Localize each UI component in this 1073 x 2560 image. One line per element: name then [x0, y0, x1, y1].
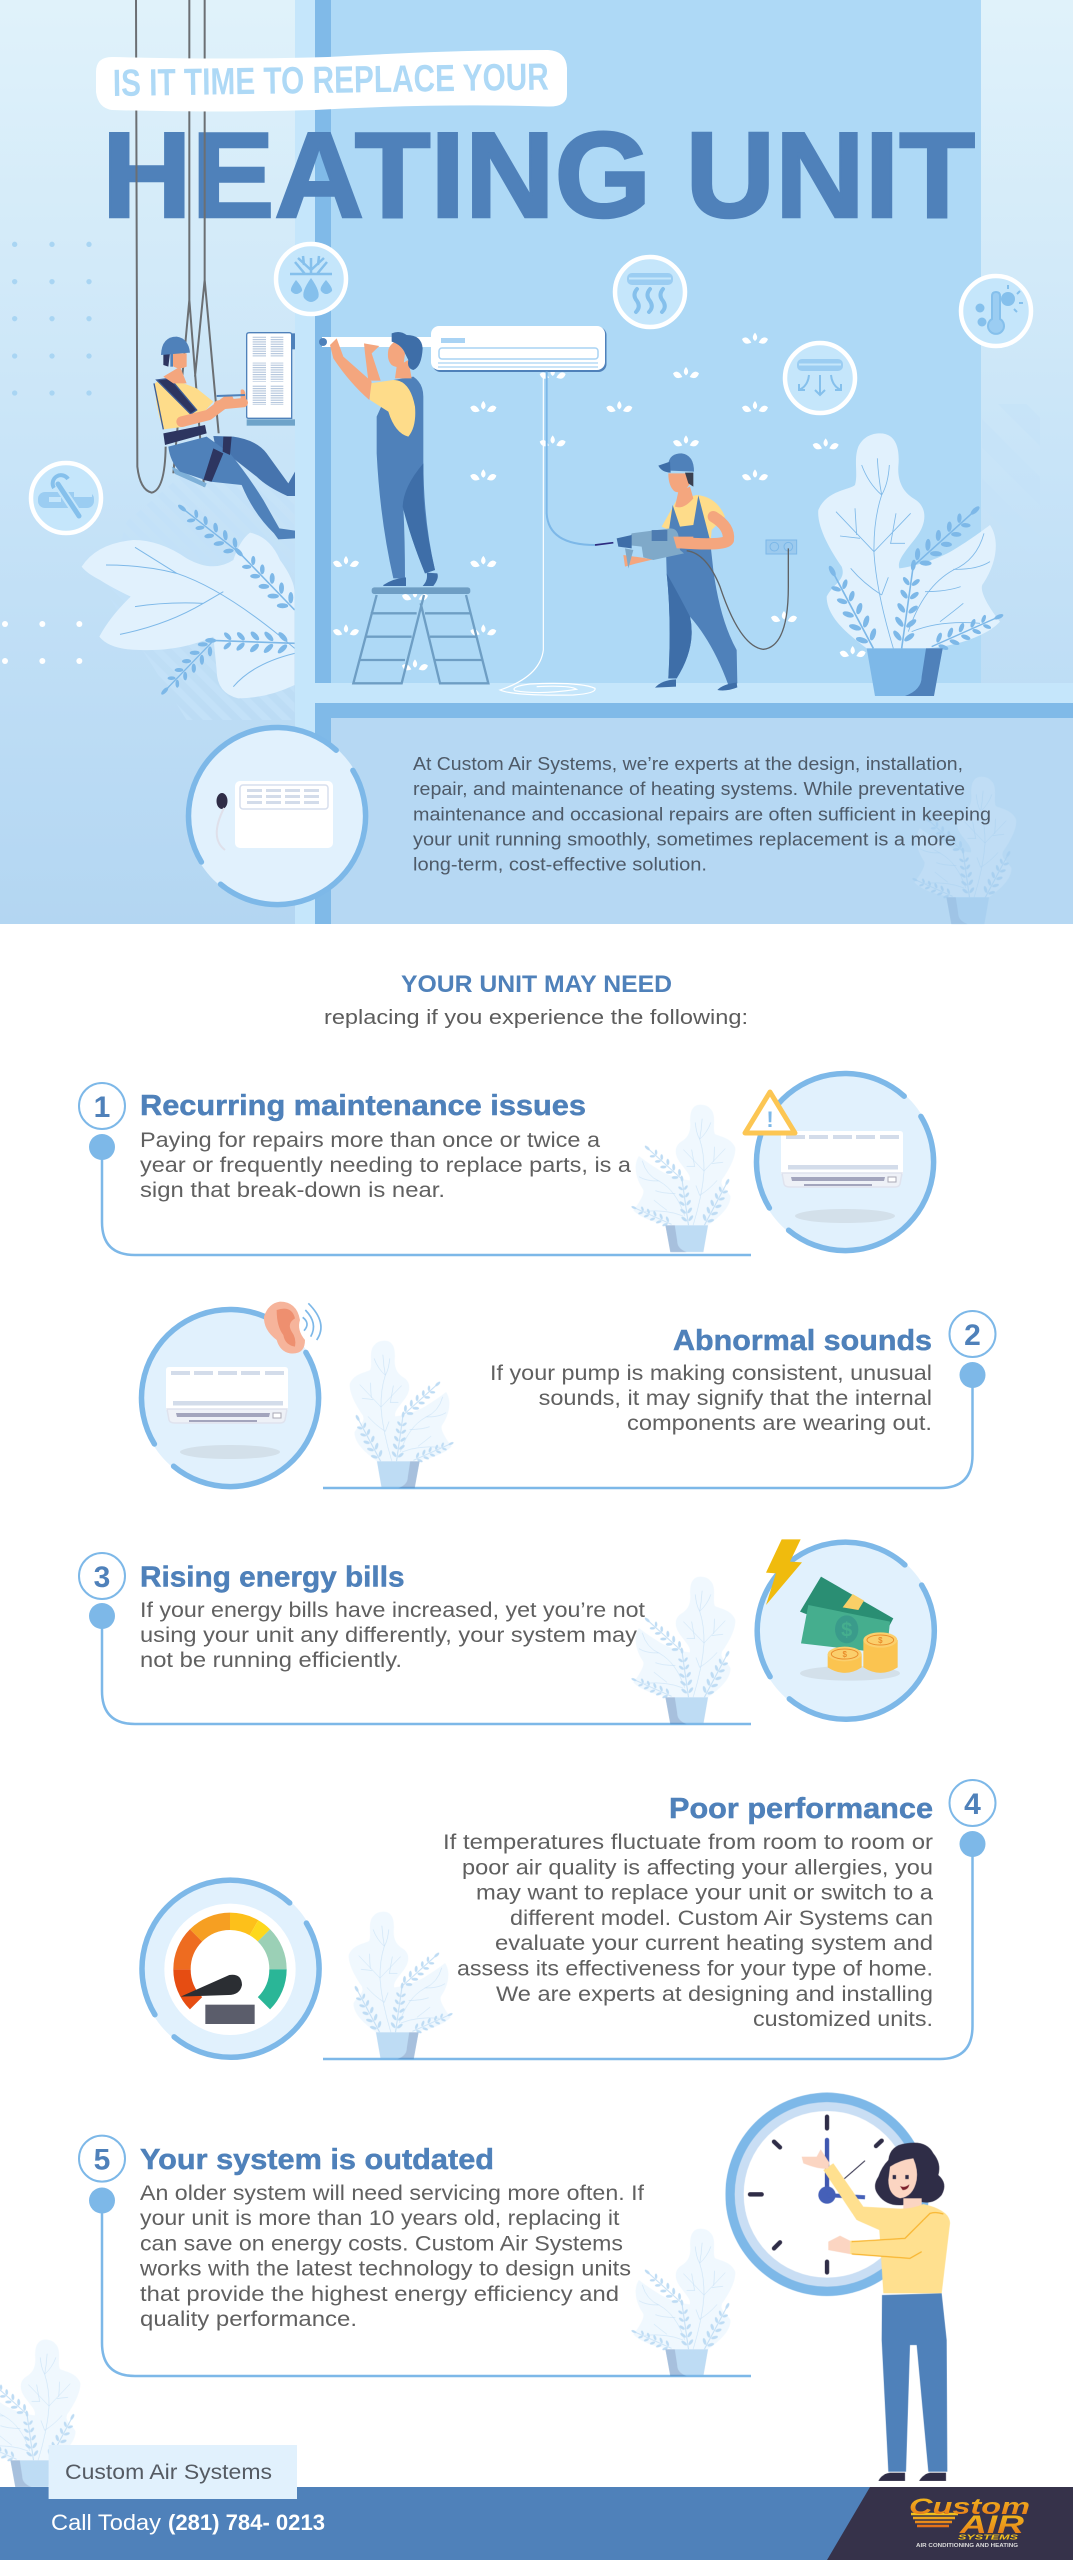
- company logo: SYSTEMS: [958, 2532, 1018, 2542]
- item 5: system outdated: quality performance.: [140, 2308, 357, 2331]
- item 4: poor performance: customized units.: [753, 2008, 933, 2031]
- icon: ac unit with warning: !: [766, 1107, 774, 1132]
- item 4: poor performance: may want to replace your unit or switch to a: [476, 1882, 933, 1905]
- icon: ear: [264, 1302, 321, 1353]
- icon: money: [756, 1539, 936, 1721]
- pale plant: [629, 2229, 735, 2376]
- item 2: abnormal sounds: components are wearing out.: [627, 1412, 932, 1435]
- item 5: system outdated: [79, 2136, 751, 2376]
- item 5: system outdated: that provide the highest energy efficiency and: [140, 2283, 619, 2306]
- item 4: poor performance: We are experts at designing and installing: [496, 1983, 933, 2006]
- item 2: abnormal sounds: sounds, it may signify that the internal: [539, 1387, 932, 1410]
- company logo: [909, 2494, 1030, 2549]
- item 3: rising energy bills: 3: [94, 1561, 110, 1594]
- item 4: poor performance: 4: [964, 1788, 981, 1821]
- item 1: recurring maintenance: 1: [94, 1091, 110, 1124]
- ladder: [353, 587, 488, 683]
- pale plant: [629, 1577, 735, 1724]
- icon badge: repair tools: [31, 463, 101, 533]
- wall sprout pattern: [333, 333, 866, 670]
- item 3: rising energy bills: [79, 1539, 936, 1724]
- section heading: replacing if you experience the following:: [324, 1006, 748, 1029]
- background dots: [2, 242, 92, 664]
- icon badge: thermometer: [961, 276, 1031, 346]
- section heading: [324, 971, 748, 1029]
- item 5: system outdated: works with the latest technology to design units: [139, 2258, 631, 2281]
- section heading: YOUR UNIT MAY NEED: [401, 971, 672, 998]
- item 3: rising energy bills: not be running efficiently.: [140, 1649, 402, 1672]
- icon: ac unit with ear: [140, 1308, 320, 1488]
- company logo: AIR CONDITIONING AND HEATING: [916, 2543, 1018, 2549]
- item 1: recurring maintenance: sign that break-down is near.: [140, 1179, 445, 1202]
- item 2: abnormal sounds: Abnormal sounds: [673, 1325, 932, 1357]
- company logo: Custom: [909, 2494, 1030, 2519]
- worker holding pipe: [330, 332, 438, 586]
- icon badge: air flow: [785, 343, 855, 413]
- footer company label: Custom Air Systems: [65, 2461, 272, 2484]
- worker on ropes: [136, 0, 295, 539]
- item 5: system outdated: your unit is more than 10 years old, replacing it: [140, 2207, 620, 2230]
- item 1: recurring maintenance: year or frequently needing to replace parts, is a: [140, 1154, 631, 1177]
- item 2: abnormal sounds: 2: [964, 1319, 981, 1352]
- item 4: poor performance: different model. Custom Air Systems can: [510, 1907, 933, 1930]
- intro circle with heater: [187, 726, 367, 906]
- item 5: system outdated: Your system is outdated: [140, 2144, 494, 2176]
- hero plant right: [818, 433, 1008, 696]
- clock: [725, 2093, 929, 2296]
- footer company label: [49, 2445, 297, 2499]
- icon: money: $: [878, 1636, 883, 1645]
- pale plant: [629, 1105, 735, 1252]
- item 4: poor performance: Poor performance: [669, 1793, 933, 1825]
- item 1: recurring maintenance: Paying for repairs more than once or twice a: [140, 1129, 600, 1152]
- item 5: system outdated: can save on energy costs. Custom Air Systems: [140, 2232, 623, 2256]
- item 2: abnormal sounds: [140, 1302, 996, 1488]
- intro paragraph: maintenance and occasional repairs are often sufficient in keeping: [413, 804, 991, 824]
- item 5: system outdated: An older system will need servicing more often. If: [140, 2182, 644, 2205]
- power cables: [500, 372, 595, 695]
- icon badge: frost and drops: [276, 244, 346, 314]
- intro paragraph: [413, 754, 991, 874]
- footer phone: Call Today: [51, 2510, 161, 2535]
- item 3: rising energy bills: Rising energy bills: [140, 1562, 404, 1594]
- hero background panel: [0, 0, 1073, 924]
- pale plant: [350, 1341, 456, 1488]
- item 4: poor performance: If temperatures fluctuate from room to room or: [443, 1831, 933, 1854]
- item 5: system outdated: 5: [94, 2144, 110, 2177]
- title pill: [96, 50, 567, 112]
- left plant: [82, 504, 295, 698]
- company logo: AIR: [959, 2511, 1024, 2539]
- footer phone: (281) 784- 0213: [168, 2510, 325, 2535]
- icon: ac unit with warning: [745, 1072, 935, 1252]
- woman with clock: [725, 2093, 950, 2481]
- item 4: poor performance: [140, 1780, 996, 2059]
- worker with drill: [595, 453, 797, 690]
- icon: money: $: [842, 1650, 847, 1659]
- wall ac unit: [319, 326, 606, 372]
- ropes: [136, 0, 219, 493]
- item 2: abnormal sounds: If your pump is making consistent, unusual: [490, 1362, 932, 1385]
- title: heating unit: HEATING UNIT: [102, 107, 975, 243]
- wall ac panel: [247, 333, 295, 426]
- footer plant: [0, 2340, 80, 2487]
- title: kicker: IS IT TIME TO REPLACE YOUR: [113, 57, 549, 105]
- item 4: poor performance: poor air quality is affecting your allergies, you: [462, 1856, 933, 1879]
- intro paragraph: long-term, cost-effective solution.: [413, 854, 707, 874]
- footer bar: [0, 2487, 1073, 2560]
- item 1: recurring maintenance: Recurring maintenance issues: [140, 1090, 586, 1122]
- item 1: recurring maintenance: [79, 1072, 935, 1255]
- icon: money: $: [841, 1620, 852, 1642]
- intro paragraph: repair, and maintenance of heating systems. While preventative: [413, 779, 965, 799]
- pale plant: [349, 1912, 455, 2059]
- item 3: rising energy bills: using your unit any differently, your system may: [140, 1624, 638, 1647]
- intro paragraph: At Custom Air Systems, we’re experts at the design, installation,: [413, 754, 963, 774]
- item 4: poor performance: assess its effectiveness for your type of home.: [457, 1958, 933, 1980]
- intro paragraph: your unit running smoothly, sometimes replacement is a more: [413, 830, 956, 850]
- icon badge: heat waves: [615, 257, 685, 327]
- faint plant behind intro: [910, 777, 1016, 924]
- item 3: rising energy bills: If your energy bills have increased, yet you’re not: [140, 1599, 645, 1622]
- icon: gauge: [140, 1879, 320, 2059]
- footer phone: [51, 2510, 325, 2535]
- item 4: poor performance: evaluate your current heating system and: [495, 1932, 933, 1955]
